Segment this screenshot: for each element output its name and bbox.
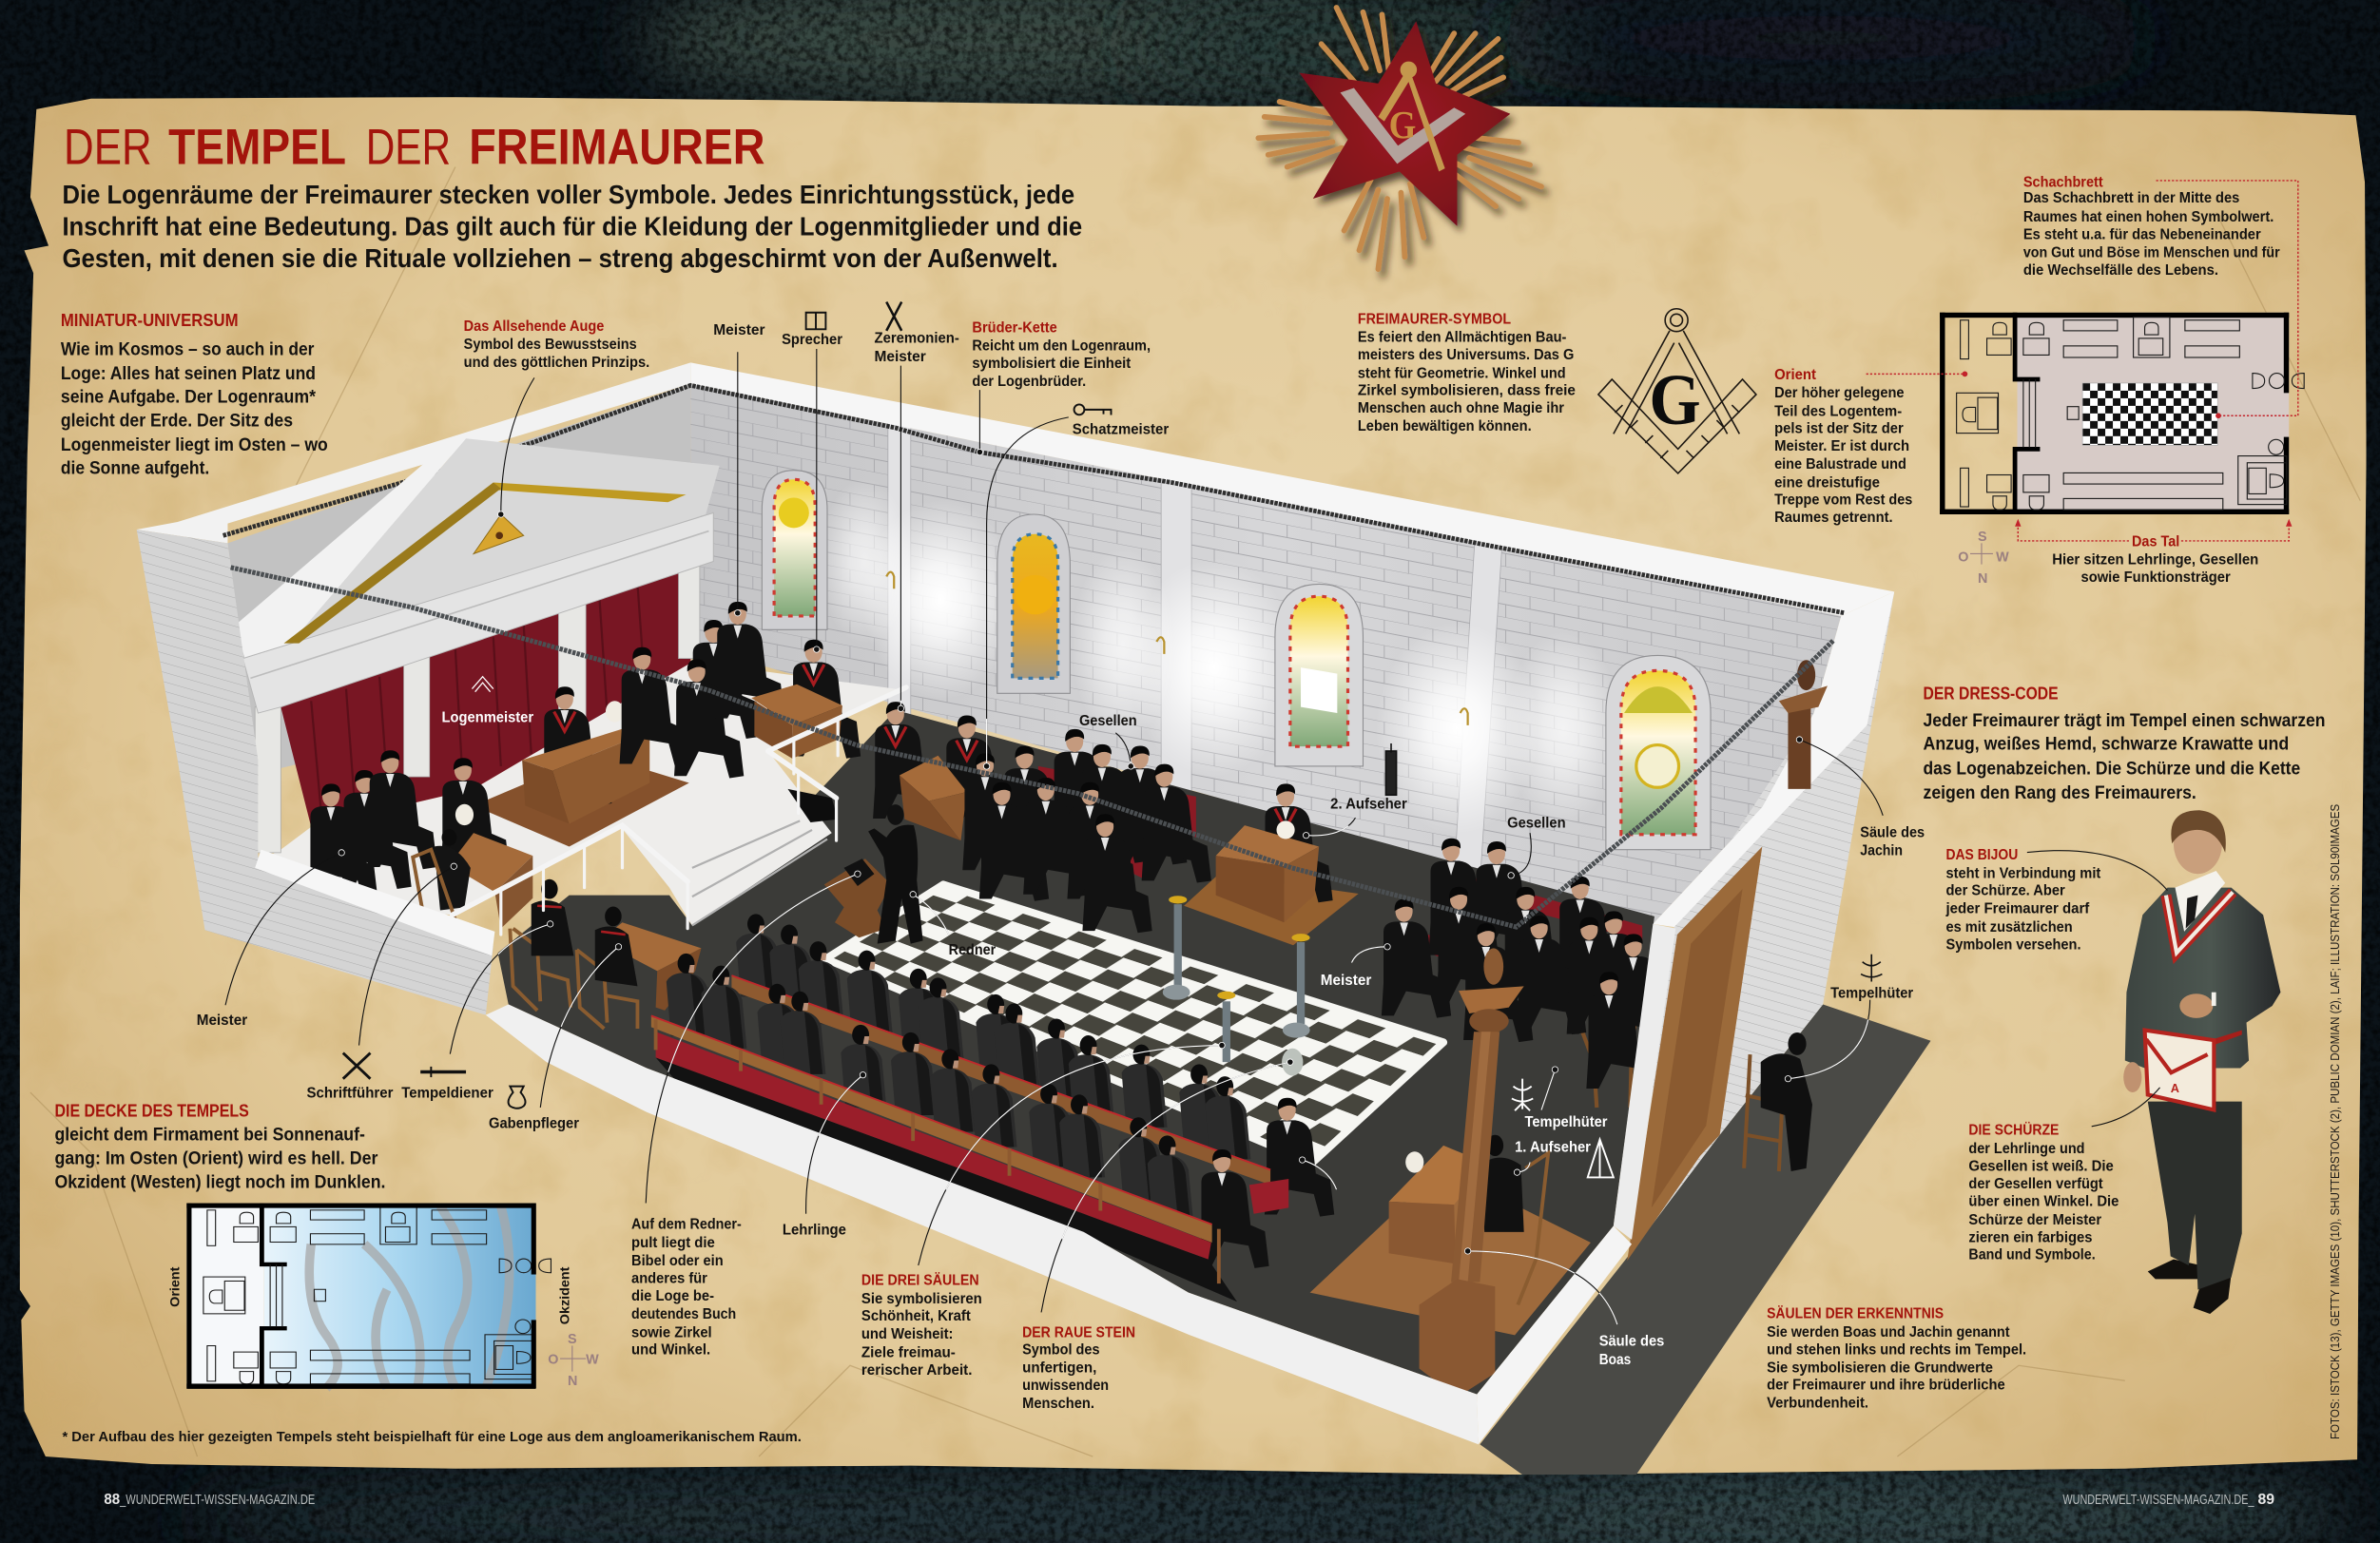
icons: officer symbols xyxy=(343,302,1111,1109)
role labels: Schatzmeister xyxy=(1073,421,1169,437)
text block: Säulen der Erkenntnis xyxy=(1767,1304,2026,1411)
plan labels and compass: N xyxy=(568,1374,577,1389)
illustration: freemason man xyxy=(2123,810,2280,1314)
role labels: Meister xyxy=(713,322,765,338)
floor plan: Schachbrett / Orient xyxy=(1940,313,2304,514)
folio left: _WUNDERWELT-WISSEN-MAGAZIN.DE xyxy=(119,1493,315,1508)
window 4 xyxy=(1606,655,1711,850)
text block: Die Schürze: DIE SCHÜRZE xyxy=(1968,1121,2060,1139)
jacket xyxy=(2125,888,2280,1068)
temple: back wall with bricks, windows and lights xyxy=(690,384,1841,924)
text block: Orient: Raumes getrennt. xyxy=(1774,510,1893,526)
text block: Das Tal: Das Tal xyxy=(2132,534,2179,550)
role labels: Redner xyxy=(949,942,996,958)
text block: Die Schürze: Band und Symbole. xyxy=(1968,1247,2096,1263)
intro text: Die Logenräume der Freimaurer stecken voller Symbole. Jedes Einrichtungsstück, jede xyxy=(62,180,1074,209)
secretary desks xyxy=(510,879,701,1029)
text block: Schachbrett: Schachbrett xyxy=(2023,174,2103,190)
text block: Orient: eine dreistufige xyxy=(1774,474,1880,491)
text block: Die Schürze: Schürze der Meister xyxy=(1968,1212,2101,1228)
text block: Brüder-Kette xyxy=(972,319,1151,390)
temple: low front wall xyxy=(486,1004,1479,1444)
role labels: Tempelhüter xyxy=(1524,1114,1607,1130)
text block: Schachbrett: Es steht u.a. für das Nebeneinander xyxy=(2023,227,2261,243)
text block: Freimaurer-Symbol: FREIMAURER-SYMBOL xyxy=(1358,312,1511,328)
role labels: Gabenpfleger xyxy=(489,1115,579,1131)
folio right: WUNDERWELT-WISSEN-MAGAZIN.DE_ xyxy=(2062,1493,2254,1508)
checkerboard floor xyxy=(825,884,1443,1163)
text block: Säulen der Erkenntnis: der Freimaurer und ihre brüderliche xyxy=(1767,1377,2005,1393)
speaker lectern with Bible and Redner xyxy=(824,804,923,944)
text block: Die Schürze: zieren ein farbiges xyxy=(1968,1230,2093,1246)
hands xyxy=(2179,993,2213,1018)
text block: Die Decke des Tempels xyxy=(54,1101,385,1193)
intro text xyxy=(62,180,1082,273)
star emblem: G xyxy=(1389,103,1416,146)
text block: Miniatur-Universum: Wie im Kosmos – so auch in der xyxy=(61,338,315,359)
role labels: Gesellen xyxy=(1079,713,1137,729)
compass rose top: N xyxy=(1978,571,1987,587)
temple: low left clapboard wall xyxy=(137,530,494,1015)
window 3 xyxy=(1275,584,1363,766)
text block: Der raue Stein: DER RAUE STEIN xyxy=(1022,1324,1135,1340)
text block: Miniatur-Universum: Loge: Alles hat seinen Platz und xyxy=(61,363,316,384)
role labels: Boas xyxy=(1599,1352,1631,1368)
role labels: Sprecher xyxy=(782,332,842,348)
Tempelhüter outside the door xyxy=(1744,1032,1812,1171)
shoes xyxy=(2148,1260,2232,1314)
temple: left inner wall xyxy=(227,384,690,774)
plan labels and compass: S xyxy=(568,1332,577,1347)
Gesellen group: upper bench xyxy=(962,729,1211,933)
text block: Schachbrett: von Gut und Böse im Menschen und für xyxy=(2023,244,2280,260)
text block: Freimaurer-Symbol: meisters des Universums. Das G xyxy=(1358,347,1574,363)
compass rose top: O xyxy=(1958,550,1968,565)
compass rose top xyxy=(1958,530,2009,587)
text block: Orient: Orient xyxy=(1774,367,1817,383)
star emblem xyxy=(1258,8,1541,269)
icon: logenmeister chevron xyxy=(472,677,493,692)
plan labels and compass: W xyxy=(586,1353,599,1368)
text block: Der Dress-Code: das Logenabzeichen. Die Schürze und die Kette xyxy=(1924,759,2300,780)
text block: Brüder-Kette: der Logenbrüder. xyxy=(972,374,1086,390)
title: DER xyxy=(64,119,152,175)
Säule Jachin xyxy=(1779,660,1828,789)
text block: Das Allsehende Auge xyxy=(464,318,649,371)
text block: Miniatur-Universum: die Sonne aufgeht. xyxy=(61,458,209,479)
text block: Der Dress-Code xyxy=(1924,684,2326,803)
text block: Auf dem Rednerpult: die Loge be- xyxy=(631,1288,714,1304)
title xyxy=(64,119,765,175)
window 1 xyxy=(762,471,827,629)
text block: Freimaurer-Symbol: Es feiert den Allmächtigen Bau- xyxy=(1358,330,1566,346)
pilasters xyxy=(888,413,1502,883)
text block: Das Allsehende Auge: und des göttlichen Prinzips. xyxy=(464,355,649,371)
text block: Miniatur-Universum: seine Aufgabe. Der Logenraum* xyxy=(61,387,316,408)
door xyxy=(1627,846,1762,1261)
text block: Das Tal: sowie Funktionsträger xyxy=(2081,569,2231,586)
text block: Auf dem Rednerpult: Auf dem Redner- xyxy=(631,1217,742,1233)
text block: Orient: Teil des Logentem- xyxy=(1774,403,1902,419)
icon: compass and square xyxy=(1598,309,1756,473)
icons: plumb and black lily xyxy=(1385,743,1882,982)
wall sconces xyxy=(886,572,1468,725)
collar band xyxy=(2166,892,2233,953)
apron xyxy=(2213,1031,2242,1046)
Logenmeister desk and platform xyxy=(474,686,689,846)
role labels: Lehrlinge xyxy=(783,1223,846,1239)
role labels: Zeremonien- xyxy=(874,331,959,347)
chain along the wall xyxy=(223,385,1845,613)
role labels: Schriftführer xyxy=(306,1085,393,1101)
Zeremonienmeister desk and upper row seats xyxy=(873,702,1196,880)
text block: Der Dress-Code: Anzug, weißes Hemd, schwarze Krawatte und xyxy=(1924,733,2289,754)
intro text: Gesten, mit denen sie die Rituale vollziehen – streng abgeschirmt von der Außenwelt. xyxy=(62,243,1058,273)
window 2 xyxy=(997,514,1070,693)
temple: wall top strips xyxy=(137,362,1894,616)
text block: Säulen der Erkenntnis: Sie symbolisieren die Grundwerte xyxy=(1767,1360,1993,1377)
text block: Die Schürze: über einen Winkel. Die xyxy=(1968,1194,2119,1210)
2. Aufseher desk xyxy=(1184,783,1359,945)
text block: Die Schürze: der Gesellen verfügt xyxy=(1968,1176,2103,1192)
plan labels and compass: Okzident xyxy=(558,1266,572,1324)
floor plan: ceiling xyxy=(186,1204,551,1389)
text block: Die Schürze: der Lehrlinge und xyxy=(1968,1141,2085,1157)
text block: Die drei Säulen xyxy=(861,1272,982,1379)
temple: main dark floor xyxy=(498,710,1654,1395)
text block: Schachbrett: Raumes hat einen hohen Symbolwert. xyxy=(2023,209,2274,225)
brothers on the platform xyxy=(308,602,784,902)
text block: Freimaurer-Symbol xyxy=(1358,312,1576,434)
text block: Die drei Säulen: Sie symbolisieren xyxy=(861,1291,982,1307)
title: DER xyxy=(366,119,451,175)
text block: Auf dem Rednerpult: Bibel oder ein xyxy=(631,1253,724,1269)
text block: Die Decke des Tempels: gleicht dem Firmament bei Sonnenauf- xyxy=(54,1124,365,1145)
text block: Die Decke des Tempels: gang: Im Osten (Orient) wird es hell. Der xyxy=(54,1148,378,1169)
photo credits: FOTOS: ISTOCK (13), GETTY IMAGES (10), SHUTTERSTOCK (2), PUBLIC DOMIAN (2), LAIF; ILLUSTRATION: SOL90IMAGES xyxy=(2328,804,2342,1439)
Säule Boas xyxy=(1420,948,1524,1398)
text block: Schachbrett: Das Schachbrett in der Mitte des xyxy=(2023,190,2239,206)
text block: Die drei Säulen: Ziele freimau- xyxy=(861,1344,956,1360)
front bench row of Lehrlinge xyxy=(651,954,1269,1302)
text block: Miniatur-Universum: gleicht der Erde. Der Sitz des xyxy=(61,410,293,431)
text block: Das Bijou: DAS BIJOU xyxy=(1945,847,2018,863)
text block: Die Decke des Tempels: DIE DECKE DES TEMPELS xyxy=(54,1101,249,1121)
role labels: Meister xyxy=(874,349,926,365)
text block: Der raue Stein: Symbol des xyxy=(1022,1342,1100,1359)
text block: Orient: Der höher gelegene xyxy=(1774,385,1905,401)
compass rose top: W xyxy=(1996,550,2009,565)
text block: Freimaurer-Symbol: Zirkel symbolisieren, dass freie xyxy=(1358,383,1576,399)
role labels: Meister xyxy=(197,1013,247,1029)
role labels: Tempeldiener xyxy=(401,1085,493,1101)
pediment with all-seeing eye xyxy=(235,438,720,713)
text block: Brüder-Kette: Reicht um den Logenraum, xyxy=(972,338,1151,355)
text block: Auf dem Rednerpult: und Winkel. xyxy=(631,1342,710,1359)
role labels: Säule des xyxy=(1599,1334,1664,1350)
text block: Die Schürze: Gesellen ist weiß. Die xyxy=(1968,1159,2114,1175)
role labels xyxy=(197,322,1925,1368)
text block: Der raue Stein: unwissenden xyxy=(1022,1378,1109,1394)
Meister group: right bench xyxy=(1382,839,1680,1108)
temple: right wall with door xyxy=(1477,591,1894,1444)
intro text: Inschrift hat eine Bedeutung. Das gilt auch für die Kleidung der Logenmitglieder und die xyxy=(62,211,1082,241)
text block: Miniatur-Universum: Logenmeister liegt im Osten – wo xyxy=(61,434,328,455)
text block: Miniatur-Universum: MINIATUR-UNIVERSUM xyxy=(61,310,239,330)
columns xyxy=(255,552,700,853)
folio right: 89 xyxy=(2257,1492,2274,1508)
illustration: freemason man: A xyxy=(2171,1081,2179,1095)
role labels: Gesellen xyxy=(1507,815,1566,831)
text block: Orient: Treppe vom Rest des xyxy=(1774,492,1912,509)
text block: Orient: pels ist der Sitz der xyxy=(1774,421,1904,437)
text block: Das Bijou: jeder Freimaurer darf xyxy=(1945,901,2090,917)
text block: Säulen der Erkenntnis: Sie werden Boas und Jachin genannt xyxy=(1767,1324,2010,1340)
1. Aufseher desk xyxy=(1310,1135,1591,1335)
text block: Auf dem Rednerpult: pult liegt die xyxy=(631,1235,715,1251)
text block: Das Bijou: Symbolen versehen. xyxy=(1945,936,2081,953)
text block: Das Bijou: steht in Verbindung mit xyxy=(1945,865,2101,881)
role labels: Säule des xyxy=(1860,824,1925,840)
plan labels and compass xyxy=(167,1266,599,1389)
text block: Freimaurer-Symbol: steht für Geometrie. Winkel und xyxy=(1358,365,1566,381)
text block: Die drei Säulen: Schönheit, Kraft xyxy=(861,1308,971,1324)
text block: Auf dem Rednerpult xyxy=(631,1217,742,1359)
shirt and tie xyxy=(2175,871,2225,932)
text block: Das Allsehende Auge: Das Allsehende Auge xyxy=(464,318,604,335)
red dotted callout lines xyxy=(1867,181,2298,541)
role labels: Logenmeister xyxy=(442,710,533,726)
torch pillars and rough stone xyxy=(1163,896,1310,1075)
text block: Die Schürze xyxy=(1968,1121,2119,1263)
role labels: 2. Aufseher xyxy=(1330,797,1407,813)
text block: Das Tal xyxy=(2052,534,2258,586)
text block: Der raue Stein: Menschen. xyxy=(1022,1396,1094,1412)
compass rose top: S xyxy=(1978,530,1987,545)
text block: Säulen der Erkenntnis: SÄULEN DER ERKENNTNIS xyxy=(1767,1304,1944,1321)
raised platform (Orient) xyxy=(264,662,906,925)
icon: compass and square: G xyxy=(1649,359,1701,440)
footnote: * Der Aufbau des hier gezeigten Tempels steht beispielhaft für eine Loge aus dem angloamerikanischem Raum. xyxy=(62,1429,802,1445)
leader endpoints xyxy=(339,449,1803,1254)
text block: Die drei Säulen: rerischer Arbeit. xyxy=(861,1362,972,1379)
folio left: 88 xyxy=(104,1492,120,1508)
text block: Säulen der Erkenntnis: und stehen links und rechts im Tempel. xyxy=(1767,1342,2026,1359)
text block: Der raue Stein xyxy=(1022,1324,1135,1412)
rear bench row of Lehrlinge xyxy=(731,914,1334,1217)
left altar desk with bent Tempeldiener xyxy=(413,804,532,940)
text block: Säulen der Erkenntnis: Verbundenheit. xyxy=(1767,1395,1868,1411)
text block: Orient: eine Balustrade und xyxy=(1774,456,1906,473)
text block: Das Bijou: es mit zusätzlichen xyxy=(1945,919,2073,935)
text block: Orient xyxy=(1774,367,1912,526)
text block: Brüder-Kette: Brüder-Kette xyxy=(972,319,1057,336)
leader lines xyxy=(225,349,2168,1324)
text block: Auf dem Rednerpult: deutendes Buch xyxy=(631,1306,736,1322)
role labels: Jachin xyxy=(1860,843,1903,859)
text block: Freimaurer-Symbol: Menschen auch ohne Magie ihr xyxy=(1358,400,1564,416)
text block: Die Decke des Tempels: Okzident (Westen) liegt noch im Dunklen. xyxy=(54,1172,385,1193)
text block: Die drei Säulen: DIE DREI SÄULEN xyxy=(861,1272,979,1289)
role labels: Tempelhüter xyxy=(1830,985,1913,1001)
plan labels and compass: Orient xyxy=(167,1266,182,1307)
Sprecher desk xyxy=(751,640,861,759)
role labels: Meister xyxy=(1321,973,1371,989)
icons: white lilies and level xyxy=(1512,1079,1614,1177)
text block: Das Tal: Hier sitzen Lehrlinge, Gesellen xyxy=(2052,552,2258,569)
text block: Schachbrett xyxy=(2023,174,2280,279)
text block: Miniatur-Universum xyxy=(61,310,328,479)
text block: Orient: Meister. Er ist durch xyxy=(1774,438,1909,454)
chain across the room xyxy=(231,568,1833,927)
text block: Das Allsehende Auge: Symbol des Bewusstseins xyxy=(464,337,637,353)
text block: Brüder-Kette: symbolisiert die Einheit xyxy=(972,356,1132,372)
text block: Der Dress-Code: zeigen den Rang des Freimaurers. xyxy=(1924,782,2196,803)
text block: Der Dress-Code: DER DRESS-CODE xyxy=(1924,684,2059,704)
text block: Der raue Stein: unfertigen, xyxy=(1022,1360,1096,1377)
balustrades xyxy=(453,687,906,935)
text block: Das Bijou xyxy=(1945,847,2101,953)
text block: Das Bijou: der Schürze. Aber xyxy=(1945,883,2065,899)
text block: Schachbrett: die Wechselfälle des Lebens. xyxy=(2023,262,2218,279)
plan labels and compass: O xyxy=(548,1353,558,1368)
folio left xyxy=(104,1492,315,1508)
text block: Der Dress-Code: Jeder Freimaurer trägt im Tempel einen schwarzen xyxy=(1924,710,2326,731)
temple: outer floor and shadow xyxy=(1480,1004,1930,1475)
role labels: 1. Aufseher xyxy=(1515,1139,1591,1155)
trousers xyxy=(2148,1102,2242,1289)
text block: Auf dem Rednerpult: anderes für xyxy=(631,1271,707,1287)
text block: Freimaurer-Symbol: Leben bewältigen können. xyxy=(1358,418,1532,434)
title: TEMPEL xyxy=(168,119,346,175)
light glows xyxy=(820,478,1621,835)
text block: Die drei Säulen: und Weisheit: xyxy=(861,1326,953,1342)
text block: Auf dem Rednerpult: sowie Zirkel xyxy=(631,1324,712,1340)
head xyxy=(2174,813,2222,874)
title: FREIMAURER xyxy=(469,119,765,175)
red curtains xyxy=(281,561,690,827)
